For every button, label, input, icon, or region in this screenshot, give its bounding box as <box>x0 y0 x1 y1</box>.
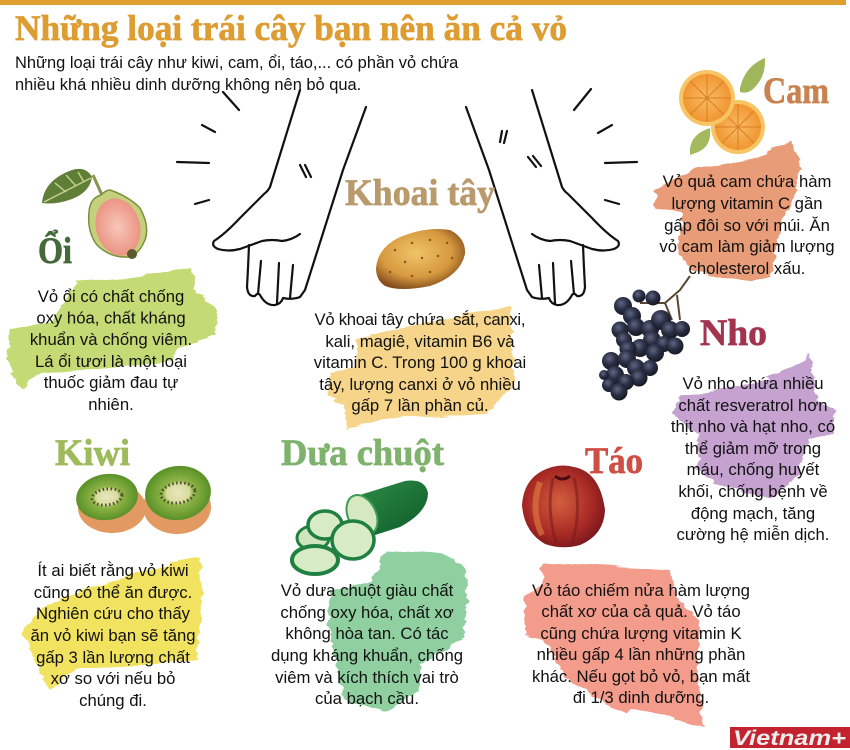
text: Cam: Vỏ quả cam chứa hàm <box>663 172 831 191</box>
icon: orange slices <box>679 58 765 155</box>
text: Nho: thể giảm mỡ trong <box>685 439 821 458</box>
intro text: nhiều khá nhiều dinh dưỡng không nên bỏ qua. <box>15 76 361 94</box>
text: Dưa chuột: không hòa tan. Có tác <box>285 624 449 643</box>
text: Ổi: nhiên. <box>88 395 134 414</box>
text: Khoai tây: kali, magiê, vitamin B6 và <box>325 332 515 351</box>
text: Khoai tây: tây, lượng canxi ở vỏ nhiều <box>319 375 521 394</box>
heading: Dưa chuột: Dưa chuột <box>281 433 445 474</box>
text: Dưa chuột: Vỏ dưa chuột giàu chất <box>281 581 454 600</box>
icon: grapes <box>599 276 690 400</box>
brush: Ổi <box>7 268 217 390</box>
text: Nho: Vỏ nho chứa nhiều <box>682 374 824 393</box>
icon: kiwi halves <box>73 462 214 534</box>
heading: Khoai tây: Khoai tây <box>345 173 495 214</box>
text: Kiwi: xơ so với nếu bỏ <box>51 669 175 688</box>
panel: Khoai tây <box>314 173 526 428</box>
icon: guava <box>42 169 147 261</box>
text: Nho: thịt nho và hạt nho, có <box>671 417 835 436</box>
icon: cucumber <box>292 480 428 574</box>
heading: Nho: Nho <box>700 313 767 354</box>
text: Kiwi: ăn vỏ kiwi bạn sẽ tăng <box>30 626 196 645</box>
text: Cam: lượng vitamin C gần <box>671 194 823 213</box>
text: Dưa chuột: dụng kháng khuẩn, chống <box>271 646 463 665</box>
text: Ổi: Lá ổi tươi là một loại <box>35 352 187 371</box>
text: Táo: đi 1/3 dinh dưỡng. <box>573 688 709 707</box>
logo: Vietnam+: Vietnam+ <box>733 727 846 750</box>
text: Khoai tây: vitamin C. Trong 100 g khoai <box>314 353 526 372</box>
text: Nho: động mạch, tăng <box>691 504 815 523</box>
panel: Táo <box>522 441 750 727</box>
text: Táo: cũng chứa lượng vitamin K <box>540 624 742 643</box>
text: Táo: nhiều gấp 4 lần những phần <box>537 645 745 664</box>
panel: Cam <box>655 58 835 283</box>
text: Nho: cường hệ miễn dịch. <box>677 525 829 544</box>
text: Cam: vỏ cam làm giảm lượng <box>659 237 835 256</box>
text: Kiwi: chúng đi. <box>79 691 147 710</box>
right arm <box>466 90 619 305</box>
intro text: Những loại trái cây như kiwi, cam, ổi, táo,... có phần vỏ chứa <box>15 54 459 72</box>
text: Cam: cholesterol xấu. <box>689 259 805 278</box>
icon: potato <box>376 229 465 289</box>
brush: Cam <box>655 140 800 283</box>
text: Táo: chất xơ của cả quả. Vỏ táo <box>541 602 741 621</box>
panel: Nho <box>599 276 835 544</box>
text: Ổi: oxy hóa, chất kháng <box>36 308 186 328</box>
text: Khoai tây: gấp 7 lần phần củ. <box>351 396 489 415</box>
text: Nho: chất resveratrol hơn <box>678 396 828 415</box>
text: Kiwi: Ít ai biết rằng vỏ kiwi <box>37 561 189 580</box>
text: Táo: Vỏ táo chiếm nửa hàm lượng <box>532 581 750 600</box>
text: Dưa chuột: chống oxy hóa, chất xơ <box>280 603 454 622</box>
brush: Khoai tây <box>328 307 515 428</box>
text: Nho: khối, chống bệnh về <box>678 482 828 501</box>
text: Khoai tây: Vỏ khoai tây chứa sắt, canxi, <box>314 310 526 329</box>
text: Ổi: khuẩn và chống viêm. <box>30 330 192 349</box>
heading: Cam: Cam <box>763 71 829 112</box>
text: Kiwi: cũng có thể ăn được. <box>34 583 192 602</box>
text: Dưa chuột: của bạch cầu. <box>315 689 419 708</box>
panel: Dưa chuột <box>271 433 468 712</box>
brush: Dưa chuột <box>328 550 468 712</box>
brush: Táo <box>525 562 703 727</box>
left arm <box>213 90 366 305</box>
text: Dưa chuột: viêm và kích thích vai trò <box>275 668 459 687</box>
text: Nho: máu, chống huyết <box>687 460 820 479</box>
top bar <box>0 0 846 5</box>
icon: apple <box>522 466 605 547</box>
panel: Ổi <box>7 169 217 414</box>
heading: Kiwi: Kiwi <box>55 433 130 474</box>
text: Ổi: Vỏ ổi có chất chống <box>38 287 184 306</box>
title: Những loại trái cây bạn nên ăn cả vỏ <box>15 8 567 48</box>
text: Táo: khác. Nếu gọt bỏ vỏ, bạn mất <box>532 667 750 686</box>
brush: Kiwi <box>22 558 203 690</box>
text: Kiwi: gấp 3 lần lượng chất <box>36 648 190 667</box>
text: Ổi: thuốc giảm đau tự <box>44 373 178 392</box>
text: Kiwi: Nghiên cứu cho thấy <box>36 604 191 623</box>
brush: Nho <box>672 355 835 500</box>
heading: Ổi: Ổi <box>38 229 72 272</box>
heading: Táo: Táo <box>585 441 643 482</box>
text: Cam: gấp đôi so với múi. Ăn <box>664 216 830 235</box>
panel: Kiwi <box>22 433 214 710</box>
hands illustration <box>177 89 637 305</box>
motion marks <box>177 89 637 204</box>
